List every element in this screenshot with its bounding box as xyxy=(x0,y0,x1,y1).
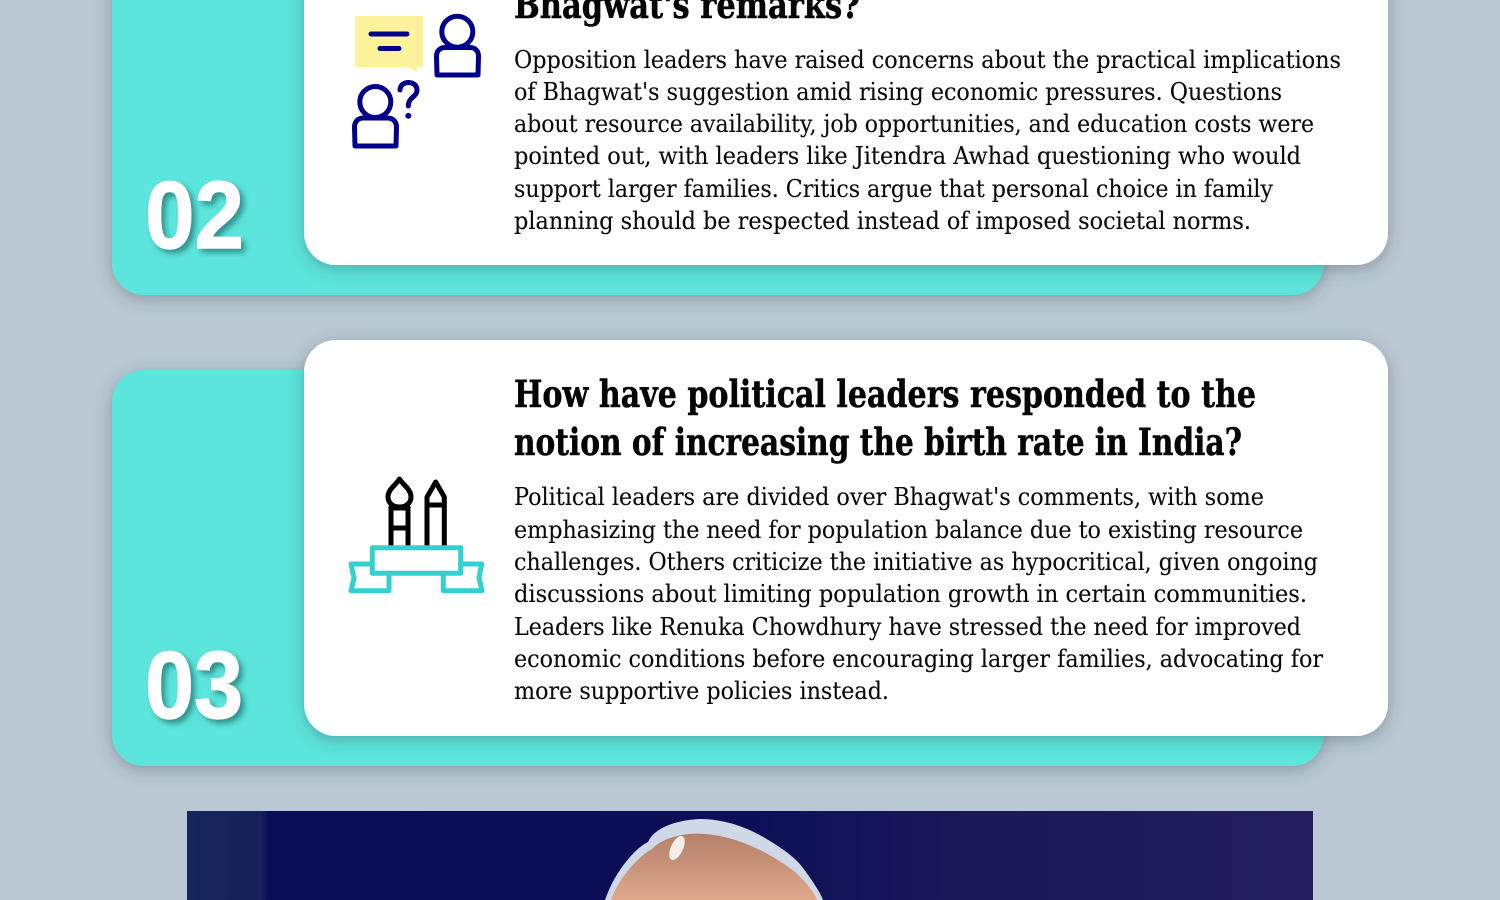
body text 03: challenges. Others criticize the initiative as hypocritical, given ongoing xyxy=(514,547,1318,576)
number 02: 02 xyxy=(145,162,244,269)
body text 03 xyxy=(514,482,1323,705)
body text 03: Leaders like Renuka Chowdhury have stressed the need for improved xyxy=(514,612,1301,641)
head with white hair xyxy=(605,819,823,900)
heading 03: How have political leaders responded to the xyxy=(514,372,1256,416)
body text 03: more supportive policies instead. xyxy=(514,676,889,705)
body text 02: planning should be respected instead of imposed societal norms. xyxy=(514,206,1251,235)
body text 03: discussions about limiting population growth in certain communities. xyxy=(514,579,1307,608)
number 03: 03 xyxy=(145,632,243,739)
body text 02 xyxy=(514,45,1341,235)
panel: question 02 xyxy=(112,0,1388,295)
body text 02: support larger families. Critics argue that personal choice in family xyxy=(514,174,1273,203)
body text 02: about resource availability, job opportunities, and education costs were xyxy=(514,109,1314,138)
body text 03: emphasizing the need for population balance due to existing resource xyxy=(514,515,1303,544)
teal backing 02 xyxy=(112,0,1324,295)
body text 02: Opposition leaders have raised concerns about the practical implications xyxy=(514,45,1341,74)
icon: brush and pen over ribbon xyxy=(351,479,482,591)
body text 03: Political leaders are divided over Bhagwat's comments, with some xyxy=(514,482,1264,511)
heading 03: notion of increasing the birth rate in India? xyxy=(514,420,1242,464)
body text 03: economic conditions before encouraging larger families, advocating for xyxy=(514,644,1323,673)
teal backing 03 xyxy=(112,370,1324,766)
panel: question 03 xyxy=(112,340,1388,766)
photo backdrop xyxy=(187,811,1313,900)
icon: two people in conversation xyxy=(354,16,478,146)
body text 02: pointed out, with leaders like Jitendra Awhad questioning who would xyxy=(514,141,1301,170)
body text 02: of Bhagwat's suggestion amid rising economic pressures. Questions xyxy=(514,77,1282,106)
photo: portrait on dark blue backdrop xyxy=(187,811,1313,900)
white card 03 xyxy=(304,340,1388,736)
heading 03 xyxy=(514,372,1256,464)
white card 02 xyxy=(304,0,1388,265)
